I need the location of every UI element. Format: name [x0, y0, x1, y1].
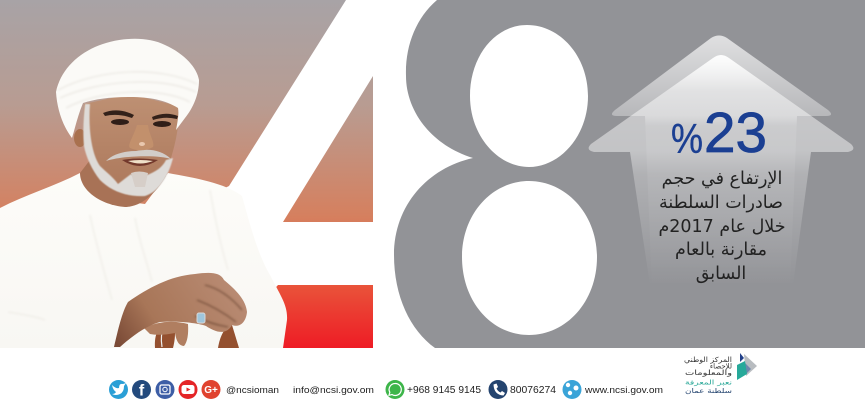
robe folds — [8, 190, 228, 320]
logo text: للإحصاء — [710, 362, 732, 370]
logo text — [684, 356, 732, 395]
goatee — [131, 172, 148, 187]
moustache — [106, 150, 171, 161]
statistic: 23% — [671, 101, 767, 165]
footer social icons — [109, 380, 220, 400]
whatsapp contact: +968 9145 9145 — [407, 385, 481, 396]
description text: الإرتفاع في حجم — [662, 169, 782, 189]
eyes — [111, 119, 129, 125]
logo mark — [737, 353, 757, 380]
turban — [56, 39, 199, 138]
ring — [197, 313, 205, 323]
social handle: @ncsioman — [226, 385, 279, 396]
icon: facebook: f — [139, 382, 145, 400]
email: info@ncsi.gov.om — [293, 385, 374, 396]
phone contact — [488, 380, 556, 399]
eyebrows — [103, 110, 134, 118]
icon: youtube — [178, 380, 198, 399]
large white numeral 4 — [0, 0, 373, 348]
description text: السابق — [696, 264, 746, 284]
icon: instagram — [156, 380, 174, 399]
description text — [658, 169, 786, 284]
logo text: نعبر المعرفة — [685, 378, 732, 386]
statistic: 23%: % — [671, 115, 703, 162]
robe — [0, 173, 287, 348]
grey panel with large numeral 8 — [394, 0, 865, 348]
neck — [80, 160, 166, 207]
gradient background — [0, 0, 373, 348]
ear — [74, 129, 86, 147]
mouth — [122, 158, 158, 166]
icon: double up arrow — [589, 36, 853, 290]
back arrow — [612, 36, 831, 290]
icon: twitter — [109, 380, 128, 399]
whatsapp contact — [386, 380, 481, 399]
phone contact: 80076274 — [510, 385, 556, 396]
logo text: والمعلومات — [685, 369, 732, 377]
cane highlight — [161, 326, 164, 347]
nose — [129, 125, 153, 150]
organisation logo — [684, 353, 757, 395]
statistic: 23%: 23 — [704, 101, 767, 165]
description text: مقارنة بالعام — [675, 240, 767, 260]
website: www.ncsi.gov.om — [584, 385, 663, 396]
logo text: سلطنة عمان — [685, 387, 732, 395]
lower finger — [144, 322, 188, 346]
icon: google plus: G+ — [204, 385, 218, 396]
logo text: المركز الوطني — [684, 356, 732, 364]
cane — [155, 324, 239, 348]
beard — [83, 104, 173, 196]
description text: صادرات السلطنة — [659, 193, 783, 213]
hands — [114, 273, 247, 347]
portrait — [0, 39, 287, 348]
front arrow — [589, 55, 853, 285]
description text: خلال عام 2017م — [658, 217, 786, 237]
turban folds — [58, 72, 197, 108]
website — [562, 380, 663, 399]
face — [83, 94, 179, 196]
knuckle shading — [195, 285, 242, 327]
